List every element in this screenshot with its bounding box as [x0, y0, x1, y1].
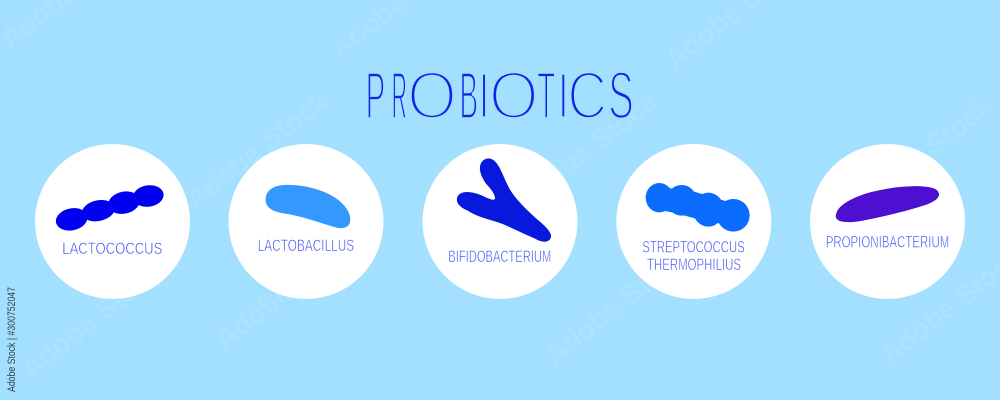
text: Adobe Stock [180, 85, 334, 215]
icon: propionibacterium rod [836, 187, 938, 222]
text: Adobe Stock [845, 90, 999, 220]
panel: lactobacillus [228, 144, 384, 299]
title: T [537, 58, 555, 133]
label: streptococcus thermophilius: STREPTOCOCCUS [642, 238, 745, 257]
icon: bifidobacterium branched rod [458, 159, 550, 241]
label: bifidobacterium: BIFIDOBACTERIUM [448, 247, 551, 266]
text: Adobe Stock [510, 85, 664, 215]
panel: bifidobacterium [422, 144, 578, 299]
title: I [554, 58, 573, 134]
title: P [366, 58, 385, 133]
title [366, 57, 634, 134]
label: streptococcus thermophilius: THERMOPHILIUS [647, 255, 741, 274]
panel: streptococcus thermophilius [616, 144, 771, 299]
title: S [608, 58, 634, 133]
text: Adobe Stock [15, 255, 169, 385]
title: C [567, 59, 607, 134]
title: R [392, 58, 407, 133]
label: lactobacillus: LACTOBACILLUS [258, 236, 354, 255]
panel: propionibacterium [810, 144, 965, 299]
icon: streptococcus chain [646, 183, 750, 232]
label: streptococcus thermophilius [642, 238, 745, 274]
title: O [407, 57, 457, 133]
title: O [489, 57, 539, 133]
text: Adobe Stock [540, 240, 694, 370]
text: Adobe Stock [210, 225, 364, 355]
title: B [459, 57, 478, 133]
icon: lactobacillus rod [266, 185, 350, 228]
panel: lactococcus [35, 144, 190, 299]
stock id caption: Adobe Stock | #300752047 [6, 287, 18, 392]
title: I [475, 58, 493, 134]
label: lactococcus: LACTOCOCCUS [62, 239, 162, 258]
icon: lactococcus chain [54, 183, 165, 233]
